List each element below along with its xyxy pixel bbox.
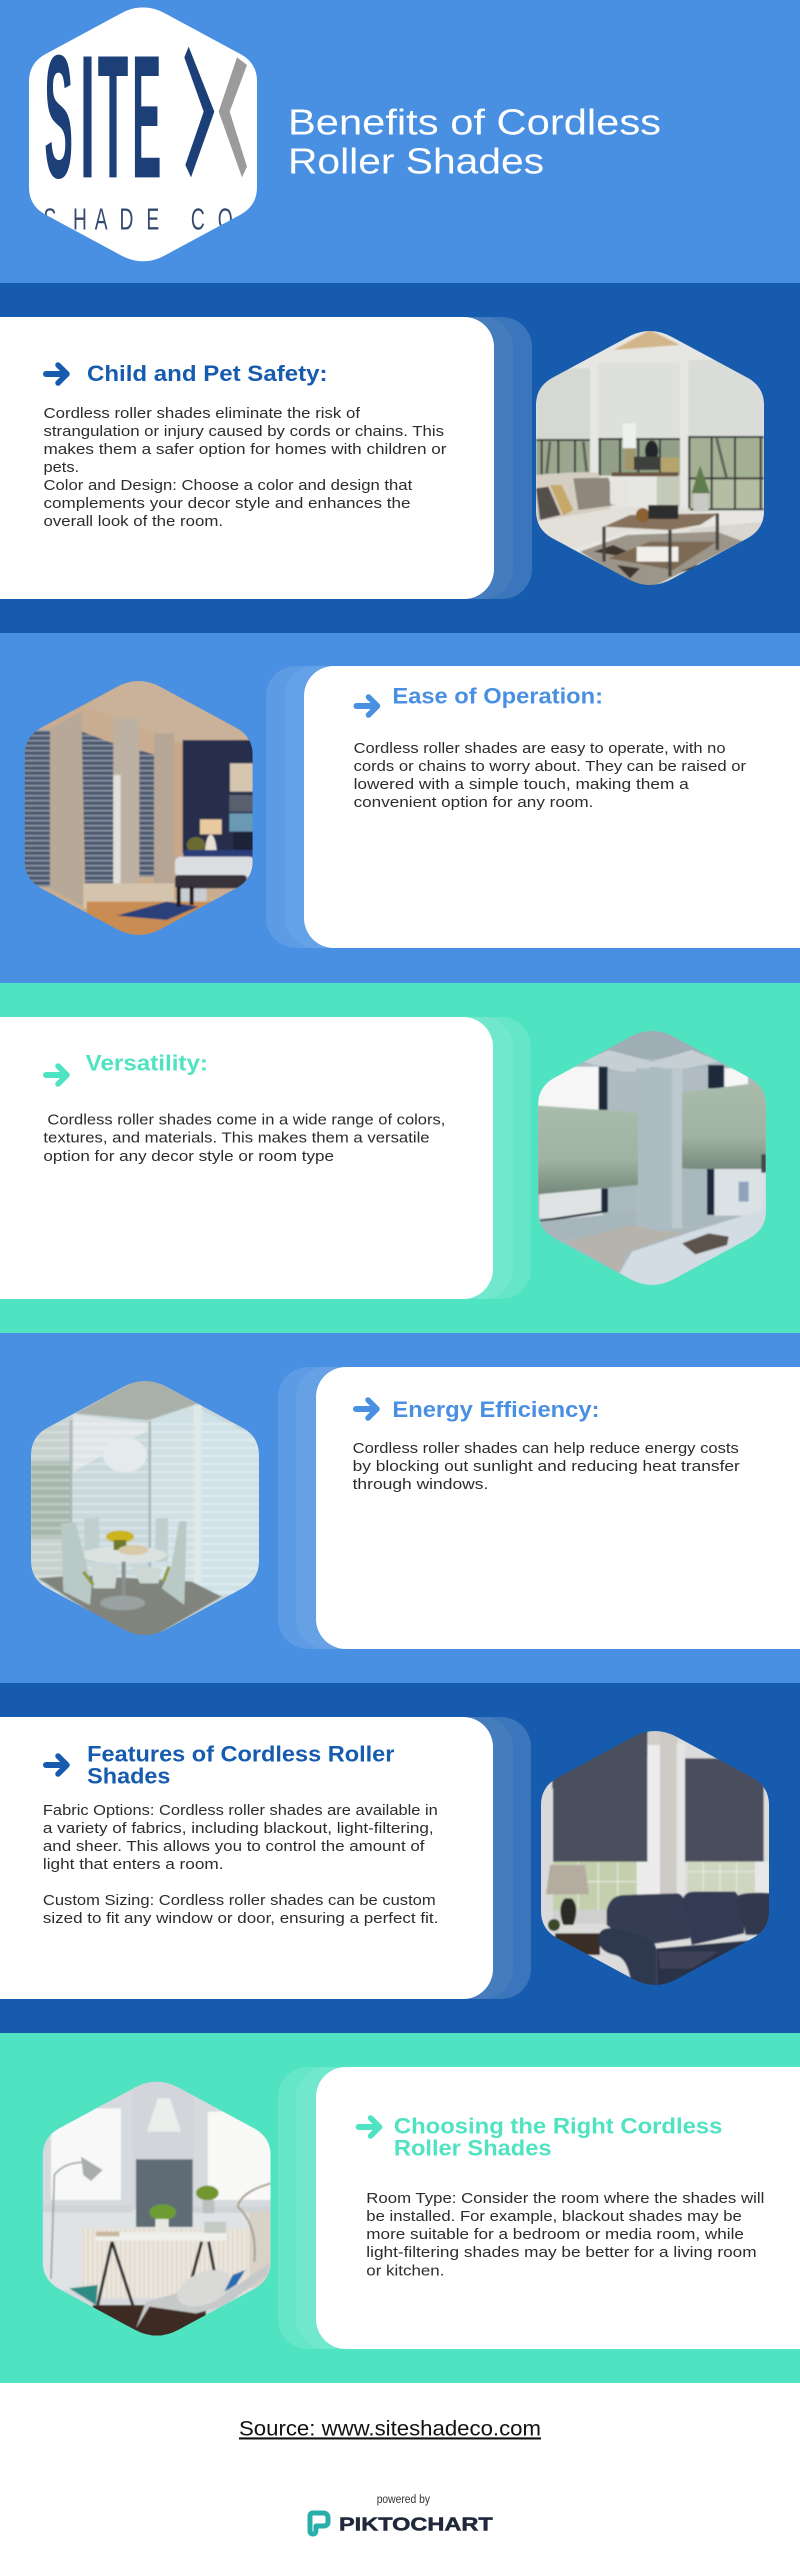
heading	[394, 2114, 722, 2161]
icon: arrow	[46, 1066, 67, 1084]
logo: Site Shade Co hexagon: T	[98, 19, 128, 215]
title: Benefits of Cordless	[288, 102, 661, 143]
panel: versatility	[0, 983, 800, 1333]
photo: home office with desk	[36, 2075, 276, 2342]
text block: Cordless roller shades are easy to operate, with no	[354, 740, 726, 757]
text block	[43, 1802, 438, 1927]
text block	[354, 740, 746, 811]
panel: choosing the right cordless roller shades	[0, 2033, 800, 2383]
text block: Custom Sizing: Cordless roller shades can be custom	[43, 1892, 436, 1909]
text block: more suitable for a bedroom or media room, while	[366, 2226, 744, 2243]
heading: Features of Cordless Roller	[87, 1742, 395, 1766]
logo: Site Shade Co hexagon: I	[80, 19, 95, 215]
text block: Color and Design: Choose a color and design that	[44, 477, 413, 494]
text block: Cordless roller shades can help reduce energy costs	[353, 1440, 739, 1457]
logo: Site Shade Co hexagon: S	[44, 19, 73, 215]
photo: bedroom with sheer blinds	[20, 675, 260, 942]
text block: by blocking out sunlight and reducing heat transfer	[353, 1458, 740, 1475]
heading: Versatility:	[86, 1051, 208, 1076]
text block: a variety of fabrics, including blackout, light-filtering,	[43, 1820, 434, 1837]
text block: sized to fit any window or door, ensuring a perfect fit.	[43, 1910, 438, 1927]
heading: Choosing the Right Cordless	[394, 2114, 722, 2138]
icon: arrow	[359, 2118, 380, 2136]
panel: ease of operation	[0, 633, 800, 983]
source line: Source: www.siteshadeco.com	[239, 2417, 541, 2440]
text block: textures, and materials. This makes them a versatile	[43, 1130, 430, 1147]
text block: and sheer. This allows you to control the amount of	[43, 1838, 425, 1855]
photo: bedroom with green shades	[532, 1025, 772, 1292]
icon: arrow	[46, 365, 67, 383]
title	[288, 102, 661, 182]
heading: Roller Shades	[394, 2136, 552, 2161]
text block: overall look of the room.	[44, 513, 223, 530]
text block: Room Type: Consider the room where the shades will	[366, 2190, 764, 2207]
heading	[87, 1742, 395, 1788]
heading: Ease of Operation:	[392, 684, 603, 709]
panel: child and pet safety	[0, 283, 800, 633]
card	[0, 317, 494, 599]
text block: strangulation or injury caused by cords or chains. This	[44, 423, 444, 440]
text block: light-filtering shades may be better for a living room	[366, 2244, 757, 2261]
text block: or kitchen.	[366, 2262, 444, 2279]
title: Roller Shades	[288, 140, 544, 182]
logo: Site Shade Co hexagon: SHADE CO	[43, 203, 233, 237]
icon: arrow	[356, 1400, 377, 1418]
logo: Site Shade Co hexagon: E	[132, 19, 161, 215]
heading: Shades	[87, 1763, 170, 1788]
text block: lowered with a simple touch, making them a	[354, 776, 690, 793]
photo: living room with light shades	[530, 325, 770, 592]
panel: energy efficiency	[0, 1333, 800, 1683]
text block	[353, 1440, 740, 1493]
logo: Site Shade Co hexagon	[23, 1, 263, 268]
footer: powered by Piktochart	[310, 2494, 494, 2535]
card	[304, 666, 800, 948]
text block: cords or chains to worry about. They can be raised or	[354, 758, 746, 775]
heading: Energy Efficiency:	[392, 1397, 600, 1422]
heading: Child and Pet Safety:	[87, 361, 328, 386]
wordmark: PIKTOCHART	[339, 2514, 494, 2535]
text block: makes them a safer option for homes with children or	[44, 441, 446, 458]
card	[316, 1367, 800, 1649]
text block: option for any decor style or room type	[43, 1148, 334, 1165]
text block: complements your decor style and enhances the	[44, 495, 410, 512]
panel: features of cordless roller shades	[0, 1683, 800, 2033]
text block: pets.	[44, 459, 79, 476]
text block: Cordless roller shades eliminate the risk of	[44, 405, 361, 422]
photo: living room with dark shades	[535, 1725, 775, 1992]
icon: arrow	[356, 697, 378, 715]
icon: arrow	[46, 1756, 67, 1774]
text block	[44, 405, 446, 530]
card	[316, 2067, 800, 2349]
text block: Cordless roller shades come in a wide range of colors,	[47, 1111, 445, 1128]
card	[0, 1017, 493, 1299]
text block: convenient option for any room.	[354, 794, 593, 811]
text block: light that enters a room.	[43, 1856, 224, 1873]
text block	[43, 1111, 445, 1165]
card	[0, 1717, 493, 1999]
text block: through windows.	[353, 1476, 488, 1493]
text block: Fabric Options: Cordless roller shades are available in	[43, 1802, 438, 1819]
text block	[366, 2190, 764, 2279]
header panel	[0, 0, 800, 283]
text block: be installed. For example, blackout shades may be	[366, 2208, 742, 2225]
footer: powered by Piktochart: powered by	[377, 2494, 430, 2506]
photo: dining room with sheer shades	[25, 1375, 265, 1642]
icon: Piktochart logo mark	[310, 2513, 328, 2534]
